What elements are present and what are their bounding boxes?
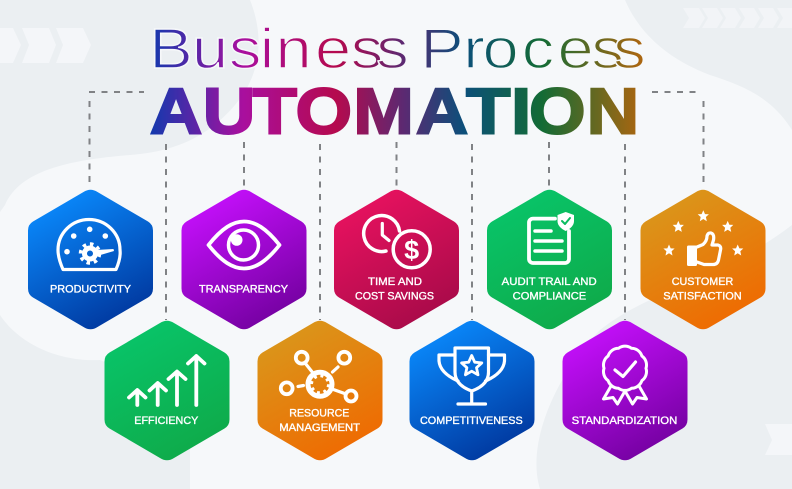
label: customer satisfaction: SATISFACTION — [663, 290, 742, 302]
panel: customer satisfaction — [640, 190, 766, 329]
label: resource management — [279, 408, 360, 434]
icon: document with shield — [529, 212, 574, 263]
label: customer satisfaction — [663, 276, 742, 302]
title line: Business Process: Business Process — [149, 17, 646, 80]
panel: efficiency — [104, 321, 230, 460]
label: time and cost savings: TIME AND — [368, 276, 422, 288]
label: standardization: STANDARDIZATION — [572, 415, 677, 427]
icon: gauge — [58, 220, 120, 270]
label: competitiveness: COMPETITIVENESS — [420, 415, 523, 427]
panel: competitiveness — [410, 321, 534, 460]
panel: transparency — [182, 190, 306, 329]
label: productivity: PRODUCTIVITY — [50, 284, 132, 296]
panel: standardization — [562, 321, 688, 460]
label: audit trail and compliance: COMPLIANCE — [513, 290, 586, 302]
label: customer satisfaction: CUSTOMER — [672, 276, 733, 288]
label: efficiency: EFFICIENCY — [134, 415, 199, 427]
label: transparency: TRANSPARENCY — [199, 284, 289, 296]
icon: eye — [208, 222, 280, 268]
dashed connectors — [89, 92, 704, 320]
icon: clock and dollar: $ — [404, 235, 419, 265]
icon: thumbs up with stars — [663, 210, 743, 266]
label: time and cost savings — [355, 276, 434, 302]
icon: network hub — [281, 352, 356, 402]
panel: audit trail and compliance — [487, 190, 612, 329]
label: time and cost savings: COST SAVINGS — [355, 290, 434, 302]
label: audit trail and compliance: AUDIT TRAIL AND — [502, 276, 597, 288]
decorative chevrons left — [0, 28, 91, 63]
icon: rosette badge — [603, 346, 647, 404]
label: audit trail and compliance — [502, 276, 597, 302]
panel: resource management — [258, 321, 382, 460]
icon: trophy — [439, 348, 504, 404]
icon: rising arrows — [129, 356, 204, 405]
panel: productivity — [28, 190, 153, 329]
decorative chevrons right — [683, 8, 792, 28]
label: resource management: MANAGEMENT — [279, 422, 360, 434]
panel: time and cost savings — [334, 190, 459, 329]
title line: AUTOMATION: AUTOMATION — [150, 75, 639, 148]
label: resource management: RESOURCE — [289, 408, 349, 420]
decorative chevron bottom right — [765, 424, 792, 455]
